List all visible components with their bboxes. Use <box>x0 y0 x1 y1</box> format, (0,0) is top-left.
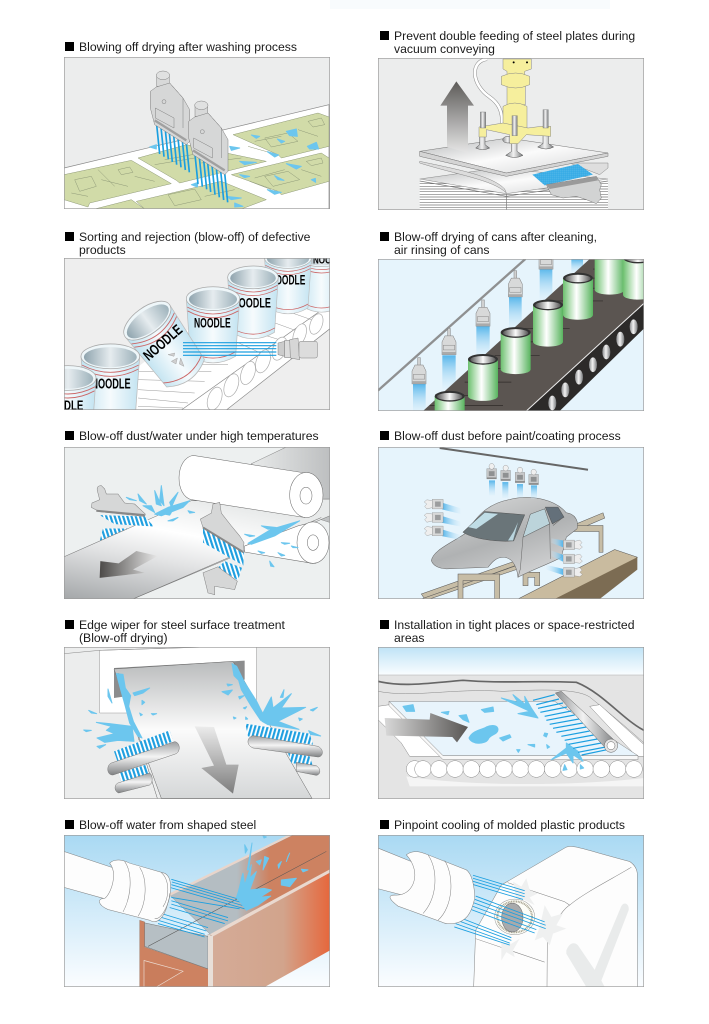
direction arrow <box>195 726 239 794</box>
heading: Blow-off dust before paint/coating process <box>394 428 621 442</box>
heading: Blowing off drying after washing process <box>79 40 297 54</box>
air jets <box>100 515 154 527</box>
illustration: noodle cups on conveyor <box>64 258 330 410</box>
nozzle: first <box>150 71 190 172</box>
nozzle <box>64 851 171 922</box>
background strip <box>251 447 330 522</box>
nozzles <box>412 243 553 384</box>
conveyor belt <box>423 259 644 411</box>
nozzle: second <box>189 101 228 202</box>
heading: Installation in tight places or space-restricted <box>394 618 634 632</box>
pipes <box>108 736 322 793</box>
splash right <box>245 521 300 567</box>
panel: tight places <box>378 618 644 799</box>
illustration: vacuum lifter over steel plates <box>378 58 644 210</box>
direction arrow <box>100 551 158 578</box>
heading: areas <box>394 631 424 645</box>
conveyor side rollers <box>526 303 644 411</box>
panel: drying of cans <box>378 230 644 411</box>
air jets <box>158 879 245 937</box>
rods <box>480 110 548 136</box>
top plate <box>420 138 608 173</box>
illustration: cans on conveyor <box>378 259 644 411</box>
panel: before paint process <box>378 428 644 599</box>
cutaway curve <box>378 680 644 730</box>
splash left <box>126 486 195 521</box>
car body <box>431 497 577 577</box>
dark opening <box>114 661 245 698</box>
sky <box>378 647 644 675</box>
air knife nozzle <box>546 176 601 204</box>
pipe <box>555 691 618 752</box>
nozzle <box>278 338 317 360</box>
heading: Blow-off dust/water under high temperatures <box>79 428 319 442</box>
water <box>403 695 584 770</box>
white housing <box>100 647 256 713</box>
water left <box>84 674 157 748</box>
burst marks <box>501 878 566 960</box>
right nozzles <box>564 540 582 577</box>
illustration: plate on roller table <box>378 647 644 799</box>
air jets <box>183 343 276 355</box>
windshield <box>463 511 525 541</box>
heading: Blow-off drying of cans after cleaning, <box>394 230 597 244</box>
heading <box>380 230 597 257</box>
embossed check mark <box>566 904 629 987</box>
tilted rejected cup <box>117 294 212 396</box>
air stripes <box>114 730 173 763</box>
cans <box>435 248 653 438</box>
left nozzles <box>424 499 443 536</box>
suction cups <box>476 131 554 158</box>
large roller <box>179 455 323 517</box>
roller table <box>406 761 642 777</box>
lifted plate <box>420 161 506 193</box>
conveyor belt <box>136 283 330 410</box>
heading <box>65 618 285 645</box>
decorative top tint <box>330 0 610 9</box>
heading: air rinsing of cans <box>394 243 490 257</box>
yellow lifter <box>479 59 551 144</box>
heading <box>380 28 635 56</box>
air jets <box>413 259 583 412</box>
panel: blowing off drying after washing <box>64 40 330 209</box>
board traces <box>71 118 325 206</box>
steel strip <box>114 661 312 798</box>
illustration: car body and nozzles <box>378 447 644 599</box>
conveyor floor <box>64 105 329 209</box>
nozzle <box>378 848 475 924</box>
wooden beam <box>518 550 637 599</box>
heading: vacuum conveying <box>394 42 495 56</box>
heading: Blow-off water from shaped steel <box>79 818 256 832</box>
illustration: noodle cups on conveyor: NOODLE <box>91 377 131 393</box>
threaded cap <box>495 899 535 935</box>
lower air knife jet behind sheet <box>100 529 128 541</box>
illustration: H-beam and nozzle <box>64 835 330 987</box>
water splash <box>236 836 308 910</box>
heading: Prevent double feeding of steel plates during <box>394 28 635 42</box>
heading <box>65 230 310 257</box>
noodle cups back row: NOODLE <box>194 314 231 330</box>
direction arrow <box>385 713 468 742</box>
nozzle: centre <box>200 502 244 553</box>
white roller bay <box>378 705 443 756</box>
heading: (Blow-off drying) <box>79 631 168 645</box>
steel sheet <box>64 499 330 599</box>
heading: products <box>79 243 126 257</box>
heading <box>380 618 634 645</box>
air jets <box>533 695 607 755</box>
circuit boards <box>64 113 329 209</box>
panel: shaped steel <box>64 818 330 987</box>
nozzle: under sheet <box>203 567 237 595</box>
panel: prevent double feeding <box>378 28 644 210</box>
heading: Sorting and rejection (blow-off) of defective <box>79 230 310 244</box>
steel plate stack <box>420 178 608 210</box>
overhead rail <box>378 259 525 391</box>
noodle cups back row: OODLE <box>239 294 271 310</box>
arrow up <box>440 81 474 153</box>
H-beam <box>140 835 330 987</box>
plate <box>389 701 638 760</box>
plastic container <box>474 846 637 987</box>
panel: sorting and rejection <box>64 230 330 410</box>
panel: edge wiper <box>64 618 330 799</box>
top nozzles <box>487 464 538 485</box>
rails <box>421 513 605 599</box>
impact marks <box>168 353 184 366</box>
side windows <box>523 509 550 537</box>
panel: high temperatures <box>64 428 330 599</box>
front noodle cups <box>81 344 140 423</box>
heading: Edge wiper for steel surface treatment <box>79 618 285 632</box>
illustration: steel strip edge wiper <box>64 647 330 799</box>
noodle cups back row: OODLE <box>275 272 305 288</box>
rollers <box>204 312 326 412</box>
water droplets <box>150 129 319 207</box>
air curtain <box>532 164 593 185</box>
tilted rejected cup: NOODLE <box>141 322 186 364</box>
vacuum hose <box>475 59 502 125</box>
nozzle: left <box>91 486 145 516</box>
air jets <box>454 875 546 945</box>
illustration: steel strip and rollers <box>64 447 330 599</box>
noodle cups back row <box>186 246 344 363</box>
water right <box>222 664 321 736</box>
air jets <box>442 480 563 575</box>
overhead bar <box>440 448 588 470</box>
heading: Pinpoint cooling of molded plastic products <box>394 818 625 832</box>
small roller <box>245 522 329 563</box>
panel: pinpoint cooling <box>378 818 644 987</box>
illustration: circuit boards and nozzles <box>64 57 330 209</box>
illustration: plastic container and nozzle <box>378 835 644 987</box>
